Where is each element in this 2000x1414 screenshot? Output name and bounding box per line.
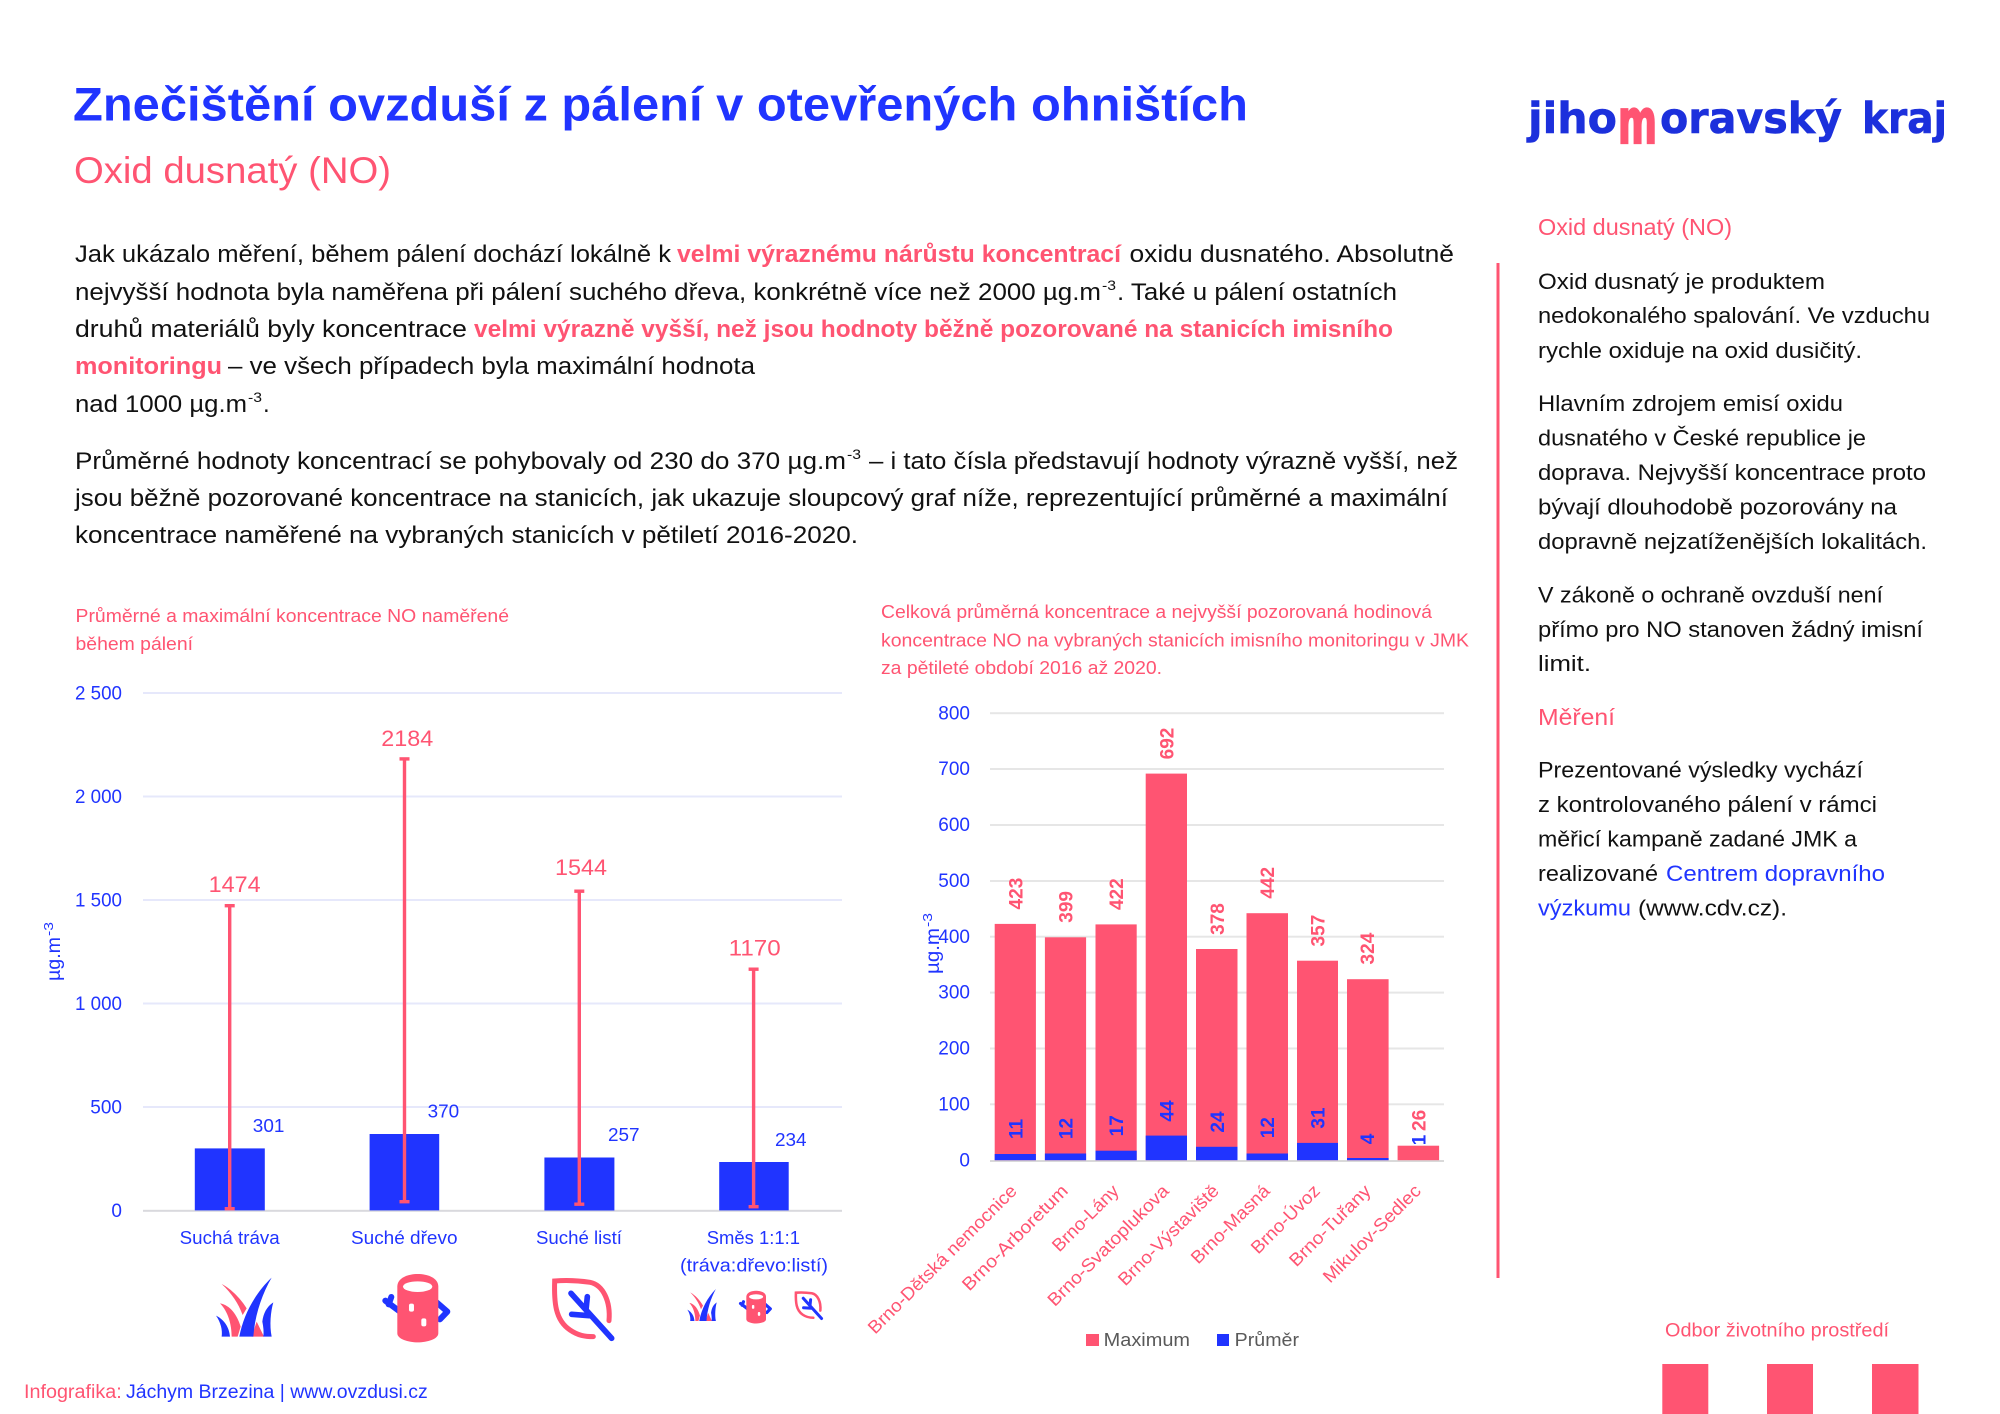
intro paragraph 2: -3: [847, 446, 861, 462]
sidebar paragraph 2: [1538, 391, 1927, 554]
maximum value labels: 26: [1410, 1110, 1430, 1131]
footer credit: Jáchym Brzezina | www.ovzdusi.cz: [126, 1382, 428, 1403]
sidebar paragraph 3: [1538, 583, 1923, 676]
sidebar paragraph 2: doprava. Nejvyšší koncentrace proto: [1538, 460, 1926, 485]
maximum value labels: 357: [1308, 915, 1330, 946]
icon: log: [385, 1274, 447, 1342]
y axis labels: 400: [938, 927, 970, 948]
sidebar paragraph 4: z kontrolovaného pálení v rámci: [1538, 792, 1877, 817]
intro paragraph 1: monitoringu: [75, 353, 222, 380]
sidebar paragraph 3: limit.: [1538, 651, 1591, 676]
sidebar paragraph 4: měřicí kampaně zadané JMK a: [1538, 827, 1858, 852]
y axis unit: µg.m: [44, 937, 65, 981]
sidebar paragraph 1: [1538, 269, 1930, 363]
right chart heading: Celková průměrná koncentrace a nejvyšší pozorovaná hodinová: [881, 602, 1433, 622]
y axis labels: 300: [938, 983, 970, 1004]
maximum value labels: 2184: [381, 726, 433, 751]
subtitle: Oxid dusnatý (NO): [74, 150, 391, 191]
legend: Průměr: [1235, 1329, 1299, 1350]
average value labels: 17: [1107, 1115, 1128, 1136]
maximum bars: [995, 774, 1439, 1160]
left chart: burning concentrations: [41, 684, 842, 1276]
y axis labels: 500: [90, 1098, 122, 1118]
right chart heading: koncentrace NO na vybraných stanicích imisního monitoringu v JMK: [881, 631, 1469, 651]
station labels: Brno-Svatoplukova: [1043, 1180, 1174, 1310]
maximum value labels: 399: [1056, 891, 1078, 923]
maximum value labels: [1006, 728, 1430, 1131]
right chart: monitoring stations: [864, 703, 1444, 1350]
icon: leaf: [555, 1281, 612, 1338]
maximum value labels: 1544: [555, 855, 607, 880]
maximum value labels: 324: [1358, 932, 1379, 964]
sidebar paragraph 1: nedokonalého spalování. Ve vzduchu: [1538, 303, 1930, 328]
average value labels: 31: [1308, 1107, 1330, 1129]
intro paragraph 1: . Také u pálení ostatních: [1117, 279, 1397, 306]
average value labels: 370: [428, 1102, 459, 1122]
intro paragraph 1: [75, 241, 1454, 418]
station labels: Brno-Úvoz: [1246, 1180, 1324, 1258]
category labels: (tráva:dřevo:listí): [680, 1255, 828, 1276]
sidebar paragraph 2: dusnatého v České republice je: [1538, 426, 1866, 450]
y axis labels: 1 000: [75, 994, 122, 1015]
y axis labels: 1 500: [75, 890, 122, 912]
y axis labels: 500: [938, 871, 970, 892]
intro paragraph 2: Průměrné hodnoty koncentrací se pohybovaly od 230 do 370 µg.m: [75, 448, 846, 475]
category labels: [180, 1227, 828, 1276]
logo: jihomoravský kraj: m: [1618, 88, 1657, 158]
y axis labels: 600: [938, 815, 970, 836]
sidebar paragraph 4: výzkumu: [1538, 896, 1631, 921]
station labels: Brno-Výstaviště: [1114, 1181, 1223, 1290]
y axis labels: 2 500: [75, 684, 122, 704]
average value labels: 12: [1056, 1118, 1078, 1139]
sidebar paragraph 2: Hlavním zdrojem emisí oxidu: [1538, 391, 1843, 416]
intro paragraph 2: – i tato čísla představují hodnoty výrazně vyšší, než: [869, 448, 1458, 475]
logo: jihomoravský kraj: jiho: [1526, 94, 1617, 144]
left chart heading: [76, 606, 509, 654]
average value labels: 24: [1208, 1111, 1229, 1133]
sidebar paragraph 4: realizované: [1538, 861, 1658, 886]
left chart heading: během pálení: [76, 634, 193, 654]
legend: Maximum: [1104, 1329, 1190, 1350]
right chart heading: [881, 602, 1469, 678]
maximum value labels: 1474: [209, 872, 261, 897]
y axis unit: [920, 913, 944, 974]
y axis labels: 0: [111, 1201, 122, 1222]
maximum value labels: 692: [1158, 728, 1178, 759]
maximum value labels: 442: [1258, 867, 1279, 899]
station labels: Brno-Masná: [1187, 1180, 1275, 1268]
sidebar paragraph 1: rychle oxiduje na oxid dusičitý.: [1538, 338, 1862, 363]
y axis unit: -3: [41, 922, 56, 936]
average value labels: 4: [1358, 1133, 1379, 1144]
average value labels: 44: [1158, 1100, 1178, 1122]
average value labels: 12: [1258, 1117, 1279, 1138]
sidebar paragraph 3: V zákoně o ochraně ovzduší není: [1538, 583, 1883, 608]
y axis unit: µg.m: [923, 928, 944, 974]
legend: [1086, 1329, 1299, 1350]
sidebar paragraph 2: dopravně nejzatíženějších lokalitách.: [1538, 529, 1927, 554]
intro paragraph 1: -3: [1102, 277, 1116, 293]
intro paragraph 1: nad 1000 µg.m: [75, 391, 247, 418]
sidebar heading: oxid dusnatý: Oxid dusnatý (NO): [1538, 214, 1732, 240]
average value labels: 257: [608, 1125, 640, 1145]
sidebar divider line: [1496, 263, 1500, 1278]
average bars: [995, 1136, 1389, 1160]
station labels: [864, 1180, 1425, 1338]
y axis unit: [41, 922, 65, 981]
y axis labels: 0: [959, 1150, 970, 1171]
intro paragraph 2: koncentrace naměřené na vybraných stanicích v pětiletí 2016-2020.: [75, 522, 858, 549]
y axis labels: 700: [938, 759, 970, 780]
department squares: [1662, 1364, 1918, 1414]
department label: Odbor životního prostředí: [1665, 1321, 1890, 1342]
maximum value labels: 378: [1208, 903, 1229, 935]
average value labels: [1006, 1100, 1430, 1145]
maximum value labels: 1170: [729, 936, 781, 961]
y axis labels: [75, 684, 122, 1222]
intro paragraph 1: -3: [248, 389, 262, 405]
sidebar paragraph 4: (www.cdv.cz).: [1638, 896, 1787, 921]
sidebar paragraph 4: Prezentované výsledky vychází: [1538, 758, 1863, 783]
average value labels: 301: [253, 1116, 284, 1136]
icon: grass: [216, 1278, 273, 1337]
category labels: Směs 1:1:1: [707, 1227, 800, 1248]
station labels: Brno-Dětská nemocnice: [864, 1181, 1021, 1338]
sidebar: text column: [1538, 214, 1930, 921]
station labels: Brno-Arboretum: [958, 1181, 1072, 1295]
category labels: Suché dřevo: [351, 1227, 458, 1248]
y axis labels: [938, 703, 970, 1171]
logo: jihomoravský kraj: kraj: [1862, 94, 1947, 144]
left chart heading: Průměrné a maximální koncentrace NO naměřené: [76, 606, 509, 626]
average value labels: [253, 1102, 807, 1150]
station labels: Brno-Lány: [1048, 1181, 1123, 1256]
logo: jihomoravský kraj: oravský: [1660, 94, 1842, 144]
average bars: [195, 1134, 789, 1210]
icon: small grass: [687, 1289, 717, 1321]
title: Znečištění ovzduší z pálení v otevřených ohništích: [73, 78, 1248, 130]
sidebar paragraph 4: [1538, 758, 1885, 921]
sidebar paragraph 3: přímo pro NO stanoven žádný imisní: [1538, 617, 1923, 642]
intro paragraph 1: .: [263, 391, 270, 418]
intro paragraph 1: Jak ukázalo měření, během pálení dochází lokálně k: [75, 241, 672, 268]
intro paragraph 1: – ve všech případech byla maximální hodnota: [228, 353, 756, 380]
sidebar paragraph 2: bývají dlouhodobě pozorovány na: [1538, 494, 1898, 520]
category labels: Suché listí: [536, 1227, 623, 1248]
footer credit: Infografika:: [24, 1382, 122, 1403]
average value labels: 1: [1410, 1134, 1430, 1145]
maximum value labels: 422: [1107, 878, 1128, 910]
sidebar heading: měření: Měření: [1538, 704, 1616, 730]
average value labels: 234: [775, 1130, 807, 1150]
intro paragraph 1: oxidu dusnatého. Absolutně: [1130, 241, 1454, 268]
intro paragraph 1: velmi výraznému nárůstu koncentrací: [677, 241, 1122, 268]
y axis labels: 200: [938, 1039, 970, 1060]
station labels: Mikulov-Sedlec: [1319, 1181, 1425, 1287]
average value labels: 11: [1006, 1118, 1028, 1139]
maximum value labels: [209, 726, 781, 961]
icon: small leaf: [796, 1293, 822, 1318]
maximum value labels: 423: [1006, 878, 1028, 909]
logo: jihomoravský kraj: [1526, 88, 1947, 158]
right chart heading: za pětileté období 2016 až 2020.: [881, 658, 1162, 678]
intro paragraph 2: jsou běžně pozorované koncentrace na stanicích, jak ukazuje sloupcový graf níže, reprezentující průměrné a maximální: [74, 485, 1448, 512]
y axis labels: 2 000: [75, 787, 122, 808]
y axis unit: -3: [920, 913, 935, 927]
station labels: Brno-Tuřany: [1285, 1181, 1375, 1270]
y axis labels: 100: [938, 1094, 970, 1115]
intro paragraph 1: velmi výrazně vyšší, než jsou hodnoty běžně pozorované na stanicích imisního: [474, 316, 1393, 343]
sidebar paragraph 4: Centrem dopravního: [1666, 861, 1885, 886]
icon: small log: [741, 1291, 770, 1324]
error bars: maximum: [225, 757, 759, 1210]
category labels: Suchá tráva: [180, 1227, 280, 1248]
intro paragraph 2: [74, 446, 1458, 549]
y axis labels: 800: [938, 703, 970, 724]
sidebar paragraph 1: Oxid dusnatý je produktem: [1538, 269, 1825, 294]
intro paragraph 1: nejvyšší hodnota byla naměřena při pálení suchého dřeva, konkrétně více než 2000 µg.m: [75, 279, 1101, 306]
intro paragraph 1: druhů materiálů byly koncentrace: [75, 316, 467, 343]
